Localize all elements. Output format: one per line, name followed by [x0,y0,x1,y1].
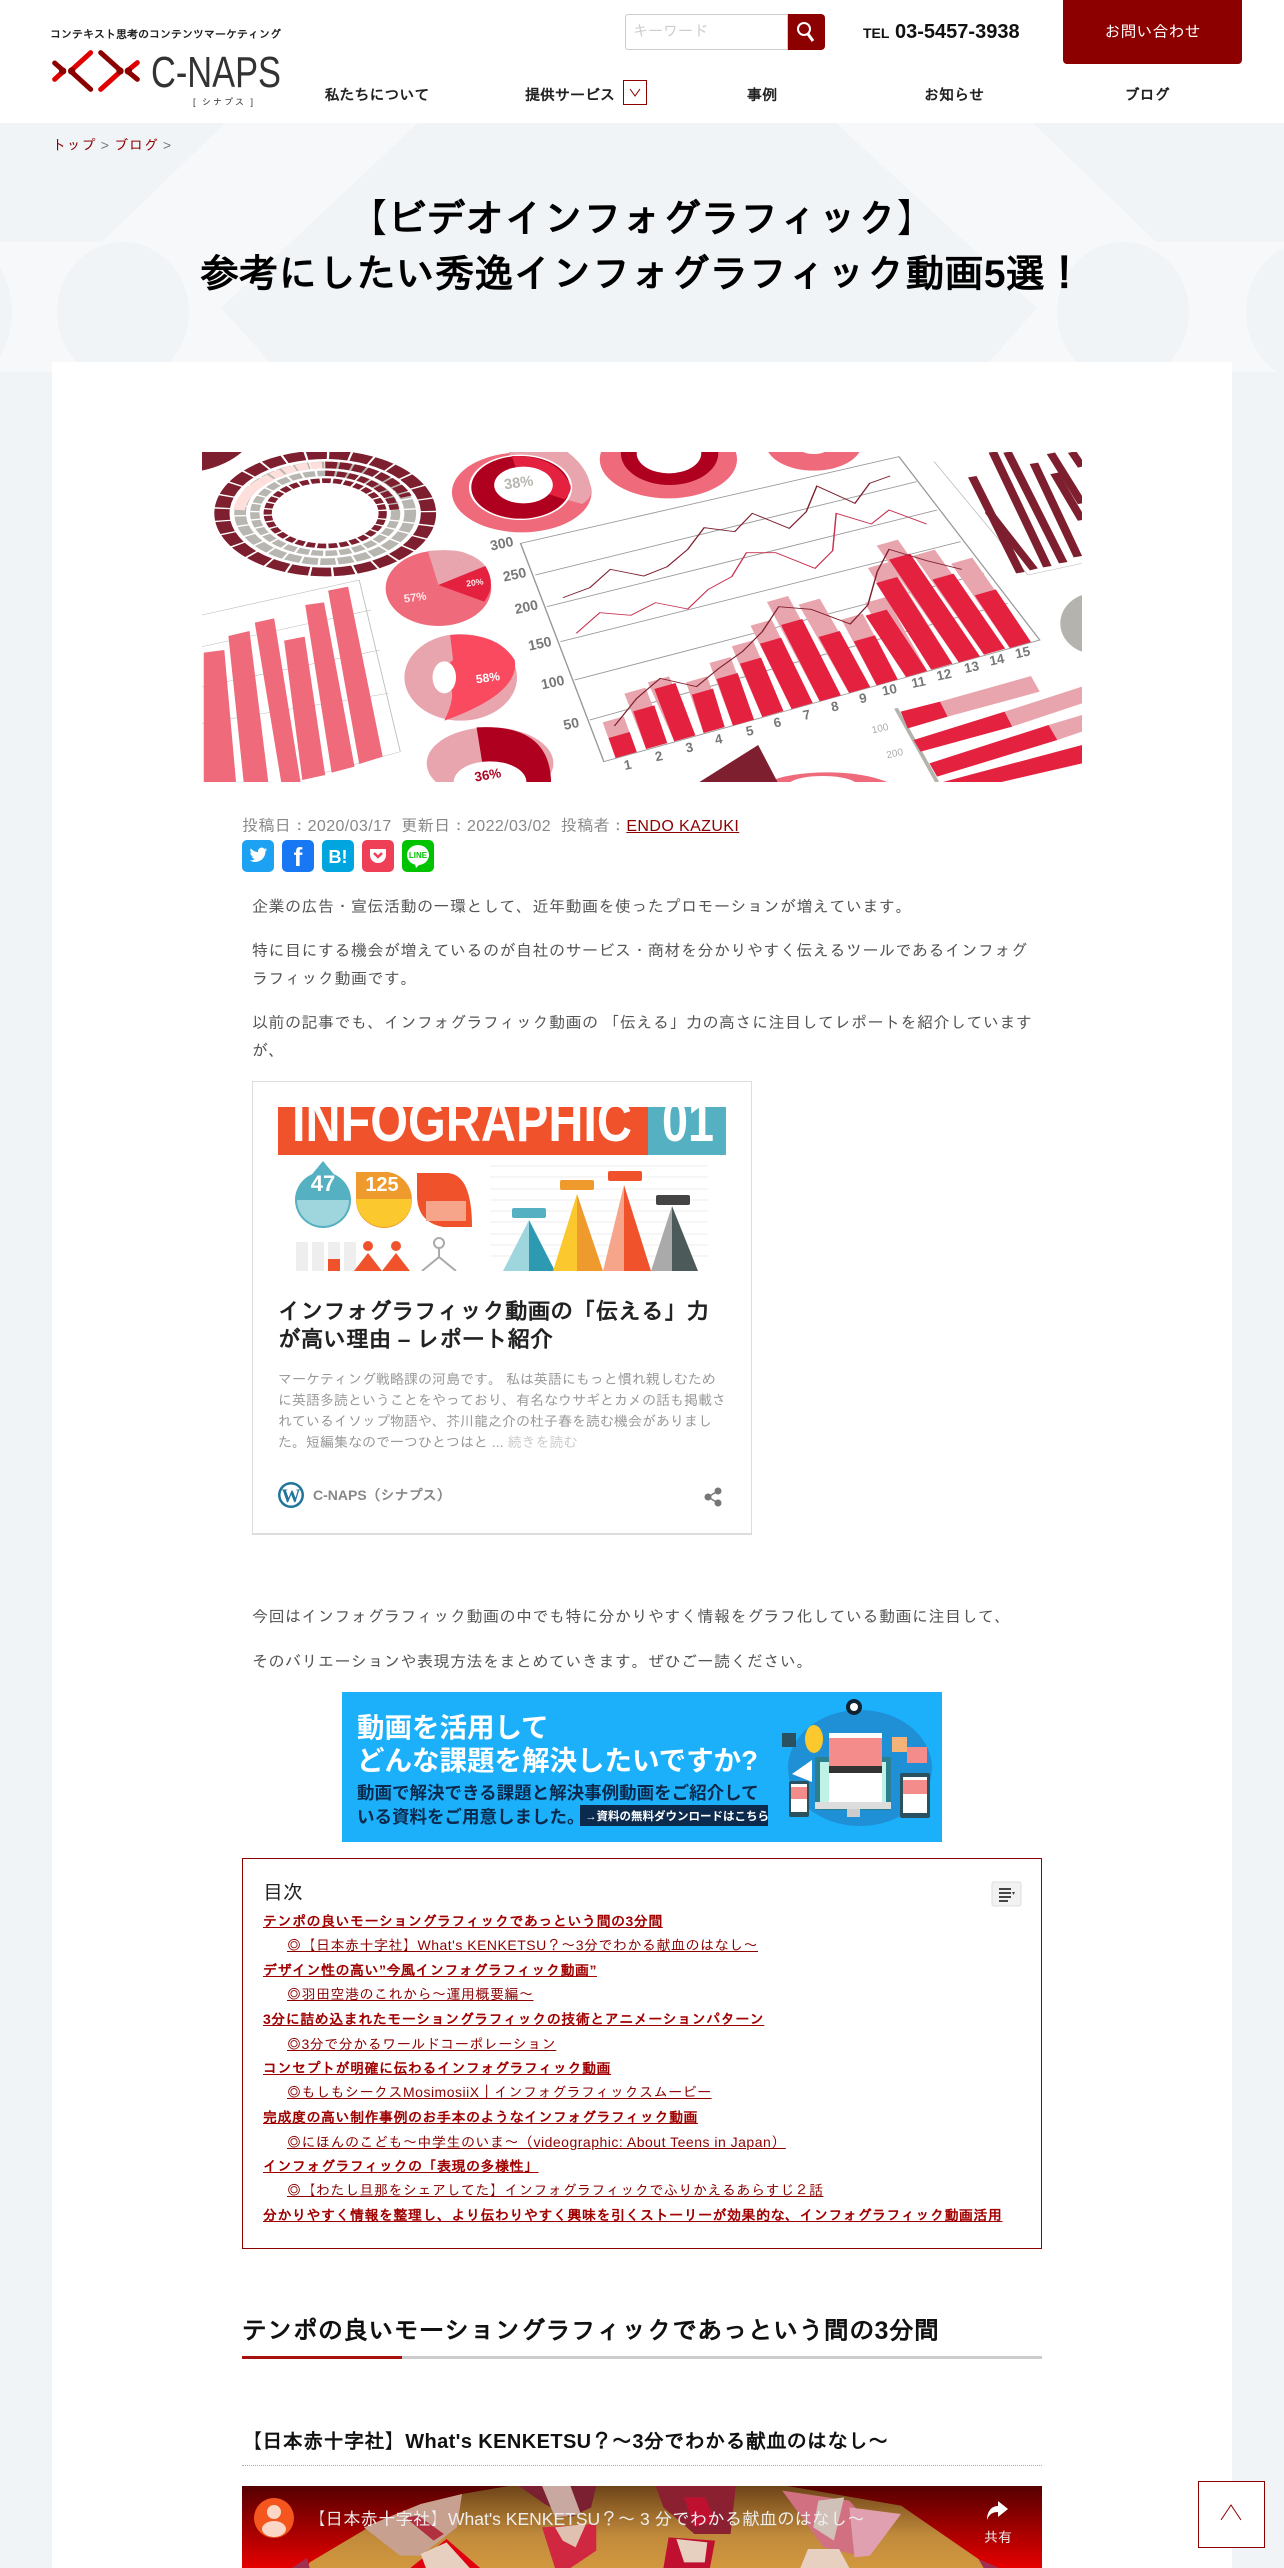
icon: toc toggle [992,1882,1022,1906]
nav: news: お知らせ [924,87,984,104]
banner heading: どんな課題を解決したいですか? [357,1745,758,1776]
icon: pocket [362,840,394,872]
page title: 【ビデオインフォグラフィック】 [348,198,936,241]
nav: blog: ブログ [1124,87,1170,104]
main chart x axis labels: 5 [745,723,755,739]
toc links: 分かりやすく情報を整理し、より伝わりやすく興味を引くストーリーが効果的な、インフォグラフィック動画活用 [263,2207,1002,2223]
main chart x axis labels: 15 [1014,643,1032,661]
logo tagline: コンテキスト思考のコンテンツマーケティング [50,29,281,41]
sub heading: 【日本赤十字社】What's KENKETSU？～3分でわかる献血のはなし～ [242,2431,889,2453]
main chart x axis labels: 12 [935,666,953,684]
nav: cases: 事例 [747,87,777,104]
main chart x axis labels: 7 [801,707,812,723]
icon: hatena: B! [328,847,348,867]
main chart lines [563,476,962,726]
video share label: 共有 [984,2529,1012,2545]
main chart x axis labels [622,643,1032,773]
nav: about: 私たちについて [324,87,430,104]
left bar chart [202,580,400,782]
donut 58% [404,634,517,721]
paragraph: intro 2: ラフィック動画です。 [252,971,417,988]
main chart x axis labels: 2 [654,748,664,764]
toc links: 3分に詰め込まれたモーショングラフィックの技術とアニメーションパターン [263,2011,764,2027]
search box [625,14,825,50]
paragraph: intro 2: 特に目にする機会が増えているのが自社のサービス・商材を分かりやすく伝えるツールであるインフォグ [252,943,1028,960]
icon: wordpress: W [282,1486,300,1507]
bottom right bars: 100 [871,722,890,736]
card excerpt [278,1371,726,1450]
main chart x axis labels: 14 [988,651,1006,669]
banner button: →資料の無料ダウンロードはこちら [585,1809,769,1823]
segmented ring [222,455,428,572]
main chart y axis labels: 50 [562,714,581,733]
back to top button [1198,2481,1265,2548]
paragraph: intro 3: 以前の記事でも、インフォグラフィック動画の 「伝える」力の高さに注目してレポートを紹介しています [252,1015,1032,1032]
contact button [1063,0,1242,64]
card image: 47 [311,1171,335,1196]
icon: video share [987,2501,1008,2520]
icon: share [704,1488,722,1506]
pie labels: 20% [465,576,484,589]
paragraph: variations: そのバリエーションや表現方法をまとめていきます。ぜひご一読ください。 [252,1654,813,1671]
dotted divider [242,2465,1042,2466]
paragraph: intro 3: が、 [252,1043,285,1060]
bottom right bars [871,676,1082,782]
bottom right bars: 200 [886,747,905,761]
toc links: ◎【わたし旦那をシェアしてた】インフォグラフィックでふりかえるあらすじ２話 [287,2182,824,2198]
logo mark [52,50,140,92]
banner heading: 動画を活用して [357,1712,549,1743]
pie labels [403,576,484,606]
main chart x axis labels: 1 [622,757,633,773]
toc links: ◎3分で分かるワールドコーポレーション [287,2036,556,2052]
main chart bars [603,540,1031,758]
icon: line [402,840,434,872]
label 38 percent: 38% [503,473,534,493]
icon: services dropdown [623,80,647,105]
toc links: ◎羽田空港のこれから～運用概要編～ [287,1986,534,2002]
donut 36% [427,727,553,799]
banner subtext: いる資料をご用意しました。 [357,1807,584,1827]
page title: 参考にしたい秀逸インフォグラフィック動画5選！ [200,253,1084,296]
toc links: ◎にほんのこども～中学生のいま～（videographic: About Teens in Japan） [287,2134,786,2150]
card excerpt: に英語多読ということをやっており、有名なウサギとカメの話も掲載さ [278,1392,726,1408]
icon: facebook [282,840,314,872]
page title [200,198,1084,296]
card excerpt: マーケティング戦略課の河島です。 私は英語にもっと慣れ親しむため [278,1371,716,1387]
pie 57% [386,551,491,626]
main chart x axis labels: 11 [910,673,927,691]
card title [278,1298,709,1352]
banner subtext: 動画で解決できる課題と解決事例動画をご紹介して [357,1783,759,1803]
main chart x axis labels: 3 [684,739,694,756]
main chart x axis labels: 8 [830,698,841,715]
post meta: 投稿日：2020/03/17 更新日：2022/03/02 投稿者：ENDO KAZUKI [242,818,739,835]
bottom centre wedge [767,772,887,782]
main chart y axis labels: 150 [527,633,553,654]
paragraph: intro 1: 企業の広告・宣伝活動の一環として、近年動画を使ったプロモーションが増えています。 [252,899,912,916]
toc links: コンセプトが明確に伝わるインフォグラフィック動画 [263,2060,611,2076]
main chart y axis labels: 100 [540,672,566,692]
video thumbnail [242,2486,1042,2568]
main chart x axis labels: 13 [963,658,980,676]
panel: article [52,362,1232,2568]
main chart y axis labels: 250 [501,564,528,585]
section heading: テンポの良いモーショングラフィックであっという間の3分間 [242,2317,939,2345]
main chart x axis labels: 6 [772,714,782,731]
card image [278,1107,726,1271]
main chart y axis labels: 300 [489,533,515,554]
card excerpt: れているイソップ物語や、芥川龍之介の杜子春を読む機会がありまし [278,1413,712,1429]
main chart x axis labels: 4 [713,731,724,747]
paragraph: this time: 今回はインフォグラフィック動画の中でも特に分かりやすく情報をグラフ化している動画に注目して、 [252,1609,1011,1626]
main chart x axis labels: 9 [858,690,868,706]
toc links: ◎もしもシークスMosimosiiX｜インフォグラフィックスムービー [287,2084,712,2100]
toc links [263,1913,1002,2223]
embed card [252,1081,752,1535]
main chart y axis labels: 200 [513,596,540,617]
donut 38% [452,452,592,532]
main chart grid [521,457,1040,762]
icon: twitter [242,840,274,872]
top right bar chart [934,452,1082,575]
banner button [580,1805,769,1826]
toc links: ◎【日本赤十字社】What's KENKETSU？～3分でわかる献血のはなし～ [287,1937,758,1953]
card title: インフォグラフィック動画の「伝える」力 [278,1298,709,1324]
search box: キーワード [633,23,708,40]
main chart y axis labels [489,533,581,733]
share icons [242,840,434,872]
card excerpt: た。短編集なので一つひとつはと ... 続きを読む [278,1434,577,1450]
card title: が高い理由 – レポート紹介 [278,1326,553,1352]
card site name: C-NAPS（シナプス） [313,1487,451,1503]
toc links: デザイン性の高い”今風インフォグラフィック動画” [263,1962,597,1978]
icon: hatena [322,840,354,872]
icon: search [788,14,825,50]
heading underline [242,2356,1042,2359]
toc links: インフォグラフィックの「表現の多様性」 [263,2158,538,2174]
label 58 percent: 58% [475,669,501,686]
paragraph: intro 3 [252,1014,1032,1060]
right grey pie [1060,593,1131,654]
paragraph: intro 2 [252,942,1028,988]
donut 19% [600,420,737,498]
icon: facebook: f [294,842,303,872]
header [0,0,1284,123]
video title: 【日本赤十字社】What's KENKETSU？～ 3 分でわかる献血のはなし～ [308,2509,865,2529]
banner subtext [357,1783,759,1827]
pie labels: 57% [403,591,427,606]
banner [342,1692,942,1842]
main chart x axis labels: 10 [881,681,898,699]
hero chart image [202,452,1082,782]
icon: wordpress [278,1482,304,1508]
table of contents [242,1858,1042,2249]
background pattern [0,123,1284,373]
banner heading [357,1712,758,1776]
icon: line: LINE [409,851,428,860]
toc links: 完成度の高い制作事例のお手本のようなインフォグラフィック動画 [263,2109,698,2125]
banner illustration [782,1699,932,1826]
logo [50,28,281,107]
toc heading: 目次 [263,1882,303,1904]
card image: 125 [365,1174,399,1196]
logo reading: [ シナプス ] [193,97,255,107]
toc links: テンポの良いモーショングラフィックであっという間の3分間 [263,1913,663,1929]
video avatar [254,2498,294,2538]
breadcrumb: トップ > ブログ > [52,137,172,153]
nav: services: 提供サービス [525,87,615,104]
contact button: お問い合わせ [1104,24,1200,41]
phone: TEL 03-5457-3938 [863,21,1020,43]
